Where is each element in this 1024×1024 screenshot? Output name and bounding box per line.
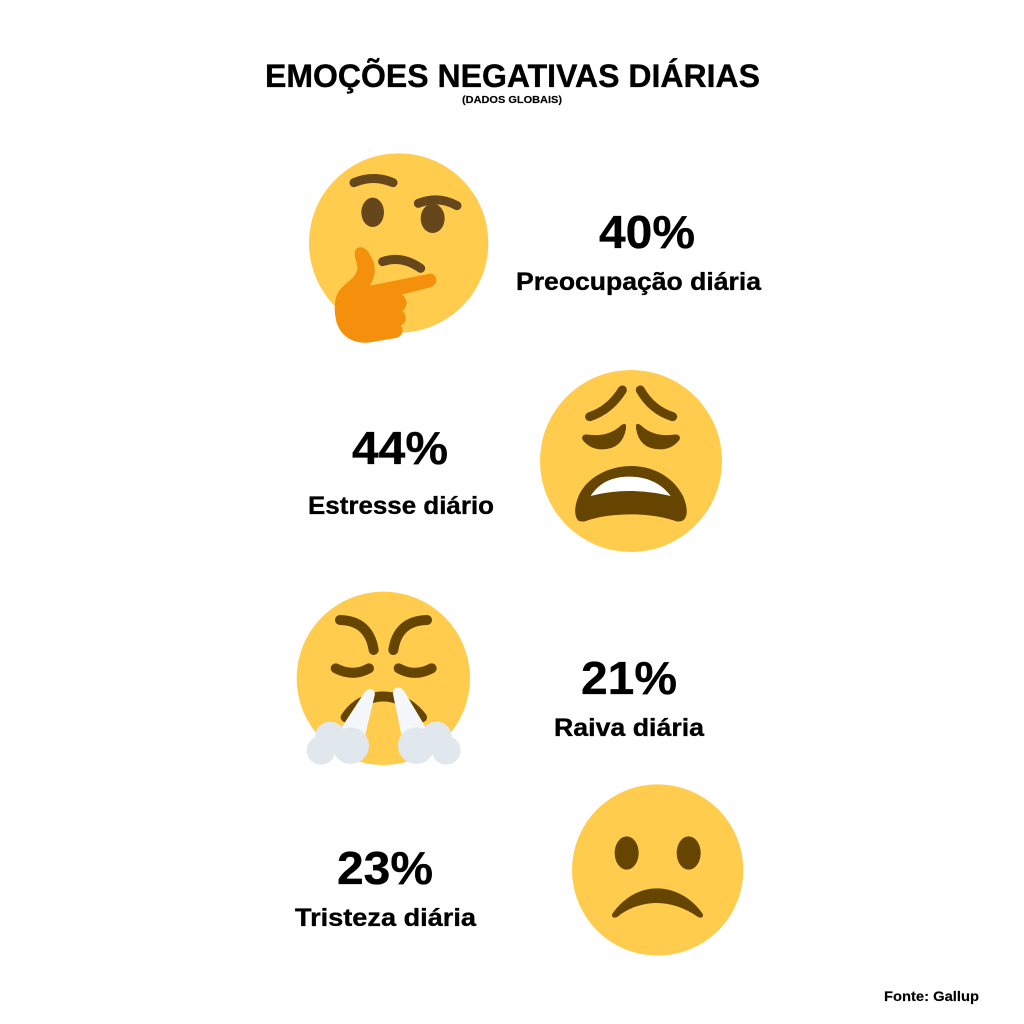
- stat: stress percentage: 44%: [352, 422, 448, 474]
- icon: weary face: [540, 370, 722, 552]
- label: daily anger: Raiva diária: [554, 714, 705, 742]
- title: EMOÇÕES NEGATIVAS DIÁRIAS: [265, 58, 760, 94]
- source note: Fonte: Gallup: [884, 988, 979, 1004]
- label: daily worry: Preocupação diária: [516, 268, 762, 296]
- subtitle: (DADOS GLOBAIS): [462, 95, 562, 106]
- stat: worry percentage: 40%: [599, 206, 695, 258]
- label: daily stress: Estresse diário: [308, 492, 494, 520]
- stat: anger percentage: 21%: [581, 652, 677, 704]
- icon: thinking face: [309, 153, 488, 343]
- icon: frowning face: [572, 784, 743, 956]
- label: daily sadness: Tristeza diária: [295, 904, 477, 932]
- icon: face with steam from nose: [297, 592, 470, 765]
- stat: sadness percentage: 23%: [337, 842, 433, 894]
